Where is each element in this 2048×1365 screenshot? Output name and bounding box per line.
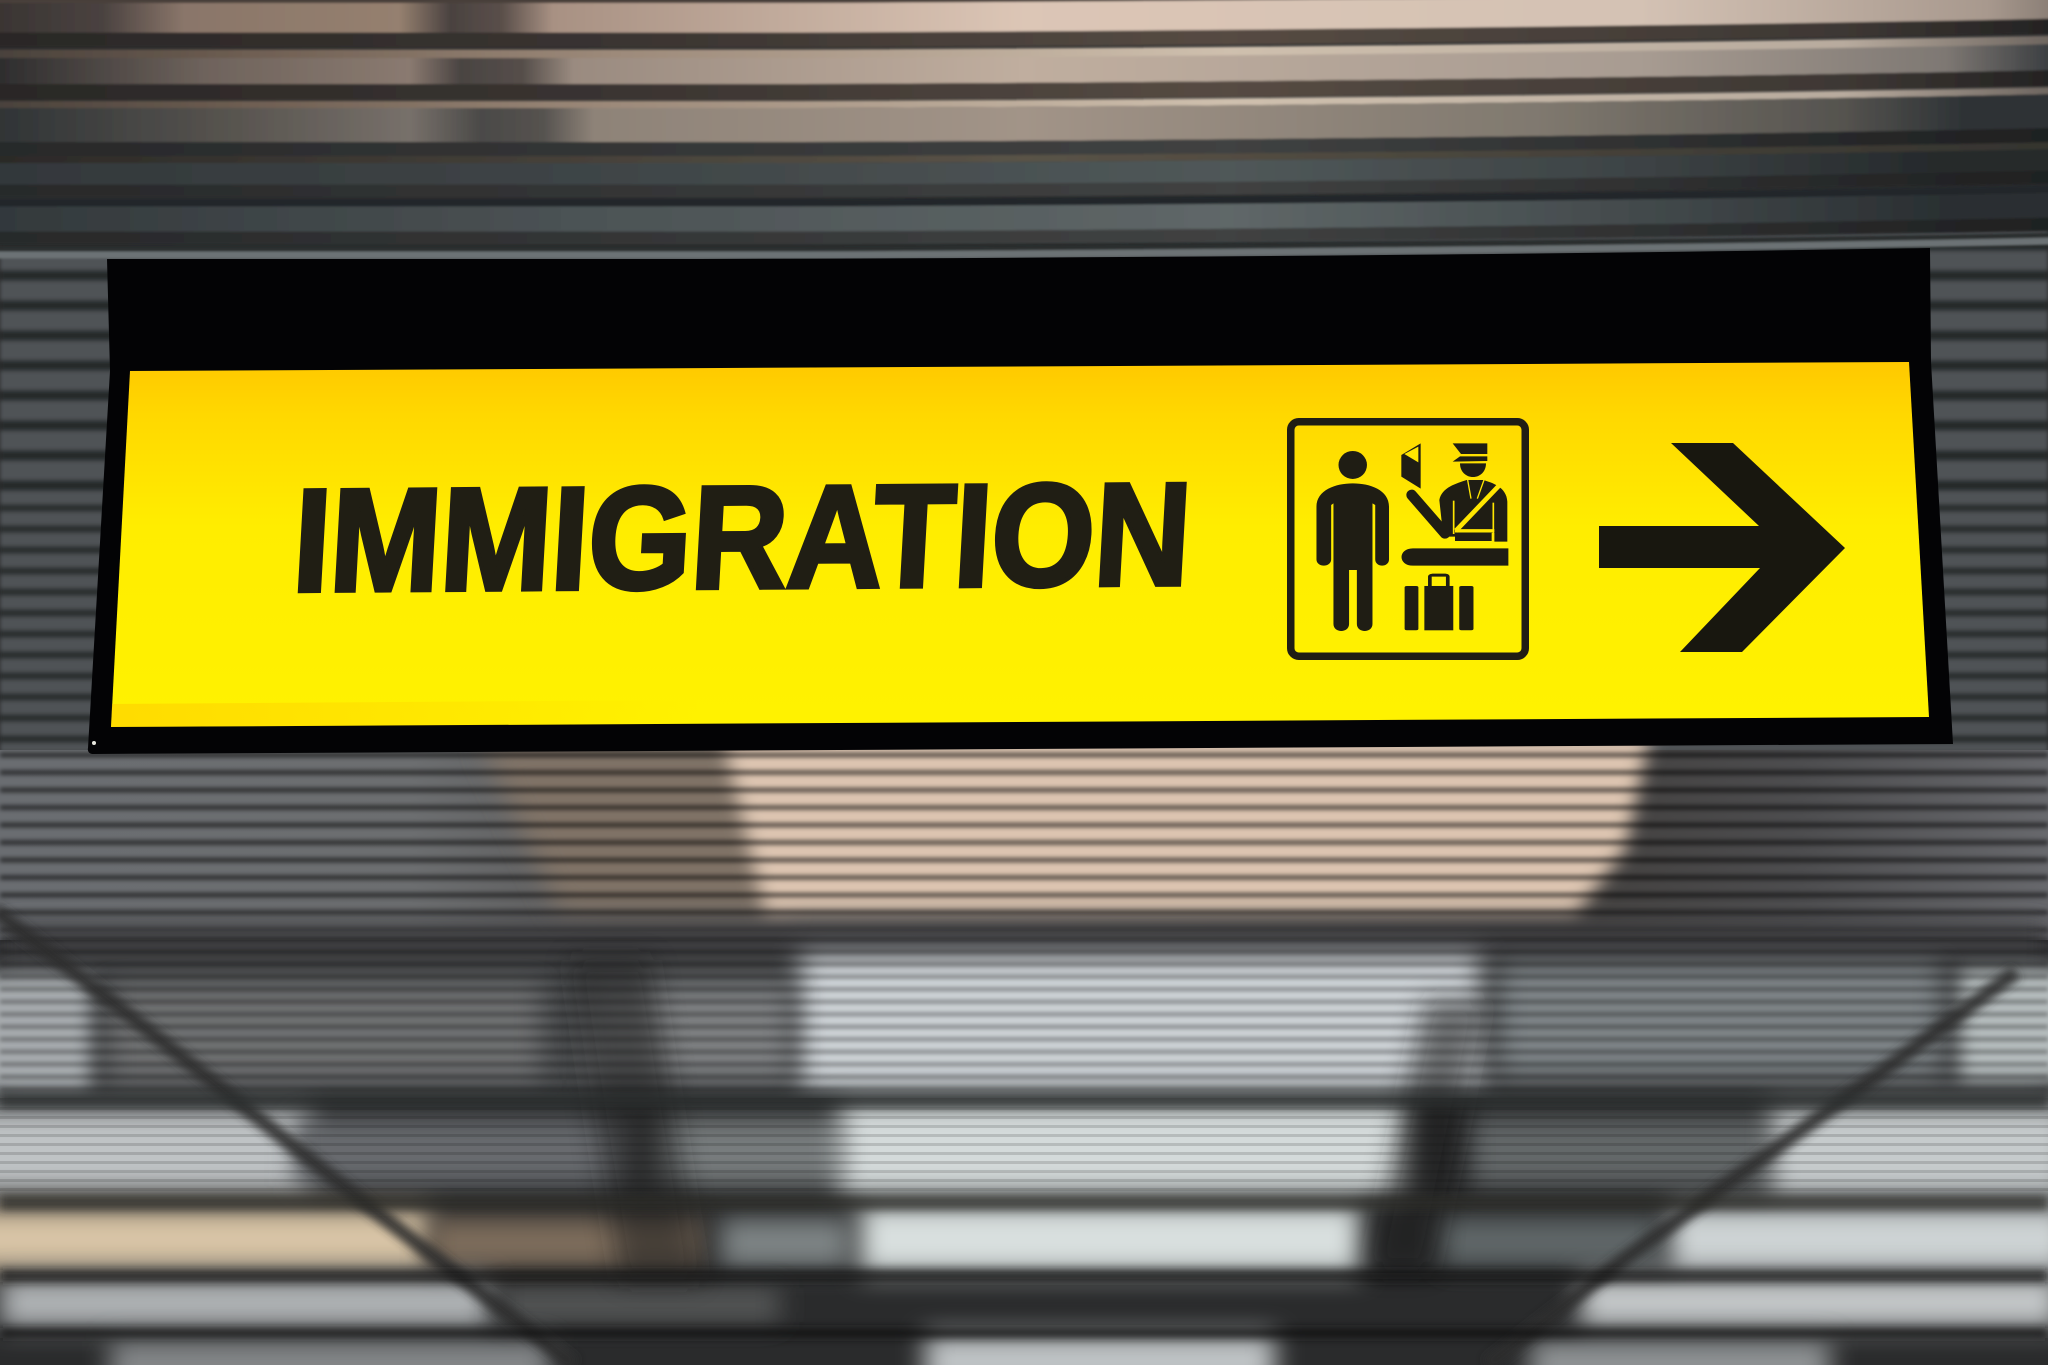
arrow	[1599, 443, 1845, 652]
sign lit panel	[111, 362, 1929, 727]
top ceiling slats	[0, 1, 2048, 255]
dim band under the warm light	[0, 924, 2048, 966]
side slats beside the sign	[0, 230, 2048, 765]
icon: traveller figure	[1316, 451, 1389, 631]
sign heading: IMMIGRATION	[289, 452, 1195, 622]
blurred diagonal ceiling beams and vertical shadows	[0, 910, 2048, 1365]
icon: immigration officer pictogram	[1291, 422, 1525, 656]
icon: suitcase	[1405, 574, 1473, 630]
icon frame	[1291, 422, 1525, 656]
icon: passport and officer	[1401, 443, 1507, 542]
icon: counter	[1402, 548, 1508, 566]
lower ceiling light panels	[0, 1098, 2048, 1365]
sign housing	[88, 248, 1953, 754]
lower ceiling slats with white light	[0, 930, 2048, 1100]
lower ceiling slats with warm light	[0, 735, 2048, 940]
